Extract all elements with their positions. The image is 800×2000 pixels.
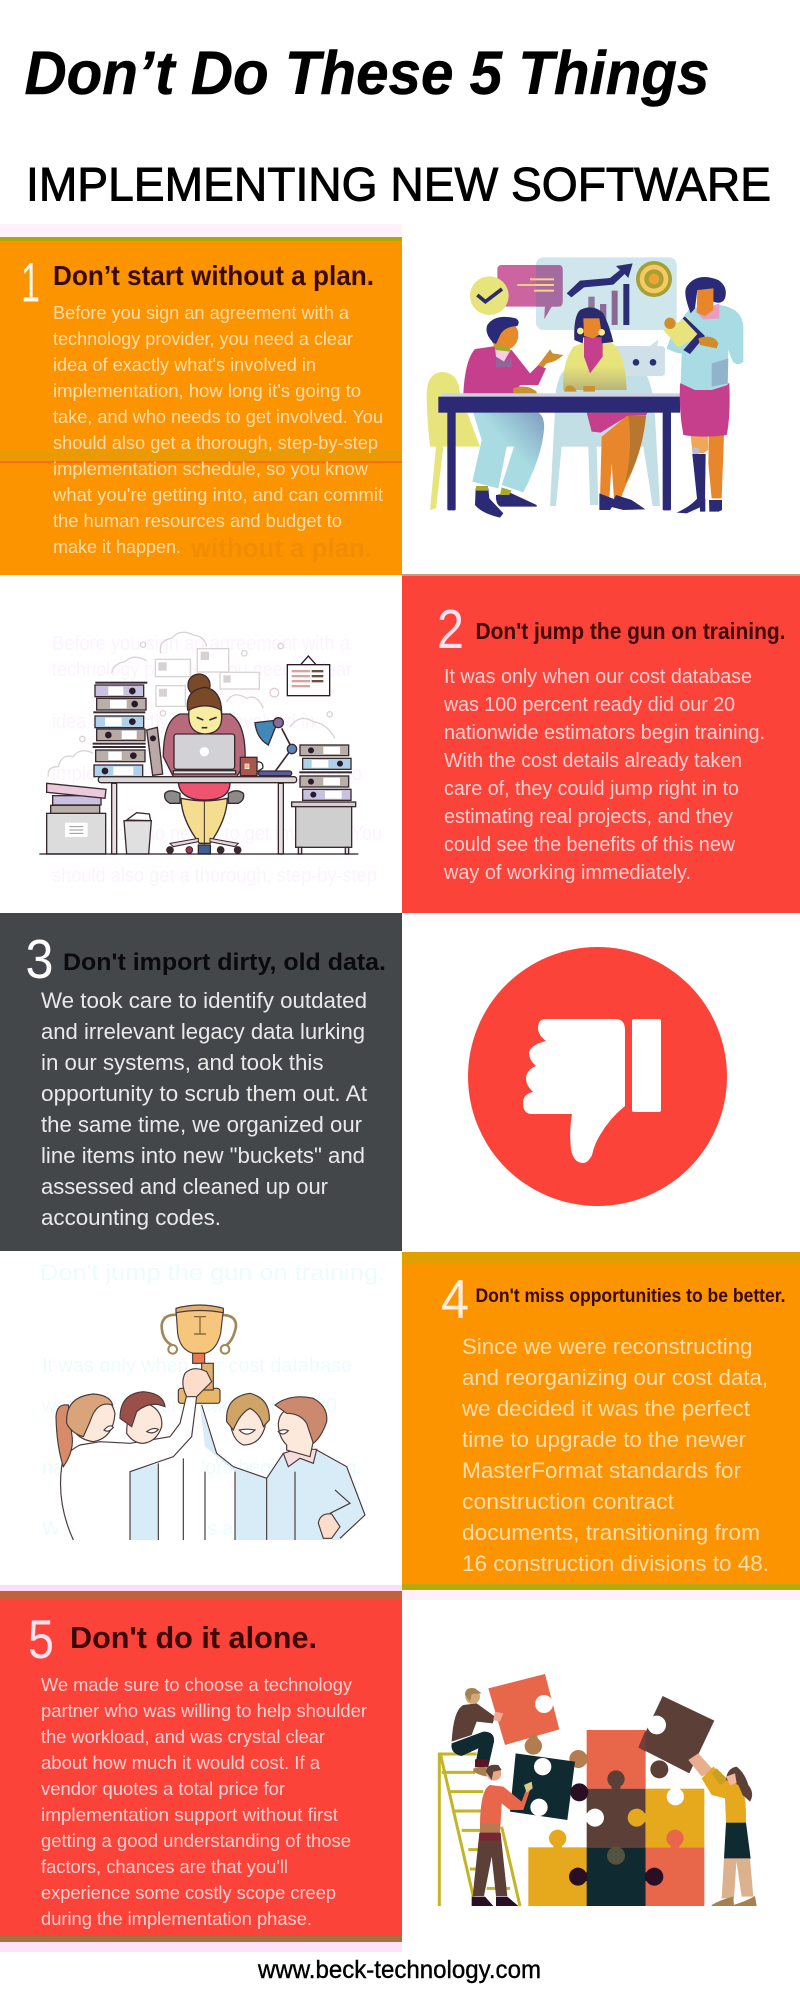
body text: step 3 <box>41 988 367 1230</box>
ghost text artefact: left white area 2 <box>52 633 382 887</box>
illustration: team meeting <box>427 257 743 518</box>
body text: step 1: implementation, how long it's going to <box>53 381 361 402</box>
body text: step 5: during the implementation phase. <box>41 1908 312 1929</box>
figure: standing woman <box>663 277 743 513</box>
figure: seated woman <box>550 307 665 510</box>
figure: man on ladder <box>451 1688 503 1777</box>
ghost text artefact: left white area 2: should also get a thorough, step-by-step <box>52 865 377 887</box>
body text: step 1: should also get a thorough, step-by-step <box>53 433 378 454</box>
ghost text artefact: left white area 4: Don't jump the gun on training. <box>40 1260 385 1285</box>
illustration: puzzle team <box>439 1674 757 1906</box>
body text: step 5: implementation support without first <box>41 1804 339 1825</box>
body text: step 3: We took care to identify outdated <box>41 988 367 1013</box>
figure: seated man <box>427 317 563 518</box>
body text: step 2: nationwide estimators begin training. <box>444 721 765 744</box>
number 4: 4 <box>441 1268 469 1330</box>
trophy <box>162 1305 236 1403</box>
body text: step 4 <box>461 1334 769 1576</box>
woman at desk <box>163 674 245 854</box>
head: dark haired man <box>120 1392 165 1443</box>
flying piece orange <box>488 1674 559 1755</box>
waste bin <box>124 813 151 854</box>
body text: step 5: vendor quotes a total price for <box>41 1778 285 1799</box>
body text: step 4: time to upgrade to the newer <box>462 1427 747 1452</box>
body text: step 1: take, and who needs to get involved. You <box>53 407 383 428</box>
ghost text artefact: left white area 2: implementation, how long it's going to <box>52 763 362 785</box>
body text: step 5: the workload, and was crystal clear <box>41 1726 325 1747</box>
body text: step 5: partner who was willing to help shoulder <box>41 1700 367 1721</box>
flying piece dark <box>510 1753 588 1820</box>
ghost text artefact: left white area 4 <box>40 1260 385 1540</box>
heading: step 5: Don't do it alone. <box>70 1621 317 1655</box>
body text: step 4: MasterFormat standards for <box>462 1458 742 1483</box>
body text: step 3: line items into new "buckets" and <box>41 1143 365 1168</box>
head: smiling man <box>227 1393 269 1445</box>
binder stack right and cabinet <box>292 745 356 854</box>
bodies <box>57 1369 365 1540</box>
ghost text artefact: left white area 2: Before you sign an agreement with a <box>52 633 351 655</box>
body text: step 2 <box>443 665 765 884</box>
desk lamp and mug <box>240 718 297 776</box>
body text: step 4: documents, transitioning from <box>462 1520 760 1545</box>
body text: step 3: accounting codes. <box>41 1205 221 1230</box>
number 5: 5 <box>28 1608 54 1670</box>
body text: step 3: in our systems, and took this <box>41 1050 324 1075</box>
body text: step 1: Before you sign an agreement with a <box>53 303 349 324</box>
heading: step 3: Don't import dirty, old data. <box>63 949 386 976</box>
flying piece brown <box>638 1696 714 1778</box>
ghost text artefact: left white area 2: take, and who needs to get involved. You <box>52 823 382 845</box>
chart: rising arrow and bars <box>567 263 633 325</box>
body text: step 2: could see the benefits of this new <box>444 833 735 856</box>
body text: step 4: 16 construction divisions to 48. <box>462 1551 769 1576</box>
body text: step 5: factors, chances are that you'll <box>41 1856 288 1877</box>
heading: step 1: Don’t start without a plan. <box>53 260 374 291</box>
body text: step 5 <box>41 1674 367 1929</box>
body text: step 5: experience some costly scope creep <box>41 1882 336 1903</box>
body text: step 1 <box>52 303 384 558</box>
number 3: 3 <box>26 928 54 990</box>
body text: step 5: about how much it would cost. If a <box>41 1752 321 1773</box>
head: man in blue shirt <box>275 1397 327 1457</box>
ghost text artefact: left white area 2: idea of exactly what's involved in <box>52 711 315 733</box>
panel: step 3 <box>0 913 402 1251</box>
body text: step 3: assessed and cleaned up our <box>41 1174 329 1199</box>
body text: step 4: Since we were reconstructing <box>462 1334 752 1359</box>
body text: step 2: care of, they could jump right in to <box>444 777 739 800</box>
body text: step 2: was 100 percent ready did our 20 <box>443 693 735 716</box>
figure: woman in yellow <box>688 1753 757 1906</box>
ghost text artefact: left white area 4: It was only when our cost database <box>42 1355 352 1377</box>
panel: step 5 <box>0 1591 402 1942</box>
ladder <box>439 1754 520 1906</box>
subtitle: IMPLEMENTING NEW SOFTWARE <box>26 158 771 210</box>
icon: target <box>636 261 672 297</box>
body text: step 4: construction contract <box>462 1489 674 1514</box>
body text: step 4: we decided it was the perfect <box>461 1396 750 1421</box>
body text: step 3: and irrelevant legacy data lurking <box>41 1019 365 1044</box>
ghost text artefact: left white area 4: With the cost details already taken <box>42 1518 340 1540</box>
body text: step 1: what you're getting into, and can commit <box>52 485 384 506</box>
archive box and binders <box>47 783 106 854</box>
number 1: 1 <box>21 250 40 314</box>
body text: step 1: idea of exactly what's involved in <box>53 355 316 376</box>
desk <box>98 777 297 854</box>
number 2: 2 <box>437 598 464 660</box>
binder stack left <box>93 682 163 777</box>
ghost text artefact: left white area 4: was 100 percent ready did our 20 <box>41 1395 337 1417</box>
ghost heading artefact: without a plan. <box>190 533 372 563</box>
illustration: stressed office worker <box>39 632 358 854</box>
table <box>438 393 680 510</box>
panel: step 4 <box>402 1252 800 1590</box>
body text: step 2: It was only when our cost database <box>444 665 752 688</box>
figure: man in orange <box>472 1765 533 1906</box>
chair base <box>167 838 241 853</box>
wall calendar <box>287 656 330 696</box>
assembled puzzle pieces <box>528 1730 704 1906</box>
body text: step 1: implementation schedule, so you know <box>53 459 368 480</box>
body text: step 2: estimating real projects, and they <box>444 805 734 828</box>
background clouds and bubbles <box>48 632 335 777</box>
speech bubble <box>497 265 563 319</box>
body text: step 5: We made sure to choose a technology <box>41 1674 353 1695</box>
body text: step 1: technology provider, you need a clear <box>53 329 353 350</box>
title: Don’t Do These 5 Things <box>24 39 710 107</box>
head: girl with ponytail <box>56 1394 115 1467</box>
body text: step 5: getting a good understanding of those <box>41 1830 351 1851</box>
body text: step 4: and reorganizing our cost data, <box>462 1365 768 1390</box>
icon: check mark <box>470 276 509 315</box>
ghost text artefact: left white area 4: nationwide estimators begin training. <box>42 1457 362 1479</box>
panel: step 1 <box>0 237 402 575</box>
icon: thumbs down <box>468 947 727 1206</box>
body text: step 2: way of working immediately. <box>443 861 691 884</box>
body text: step 2: With the cost details already taken <box>444 749 742 772</box>
body text: step 3: opportunity to scrub them out. At <box>41 1081 367 1106</box>
body text: step 1: the human resources and budget to <box>53 511 342 532</box>
illustration: team raising trophy <box>56 1305 365 1540</box>
panel: step 2 <box>402 574 800 913</box>
footer url: www.beck-technology.com <box>257 1956 541 1984</box>
body text: step 3: the same time, we organized our <box>41 1112 363 1137</box>
body text: step 1: make it happen. <box>53 537 181 558</box>
ghost text artefact: left white area 2: technology provider, you need a clear <box>52 659 352 681</box>
